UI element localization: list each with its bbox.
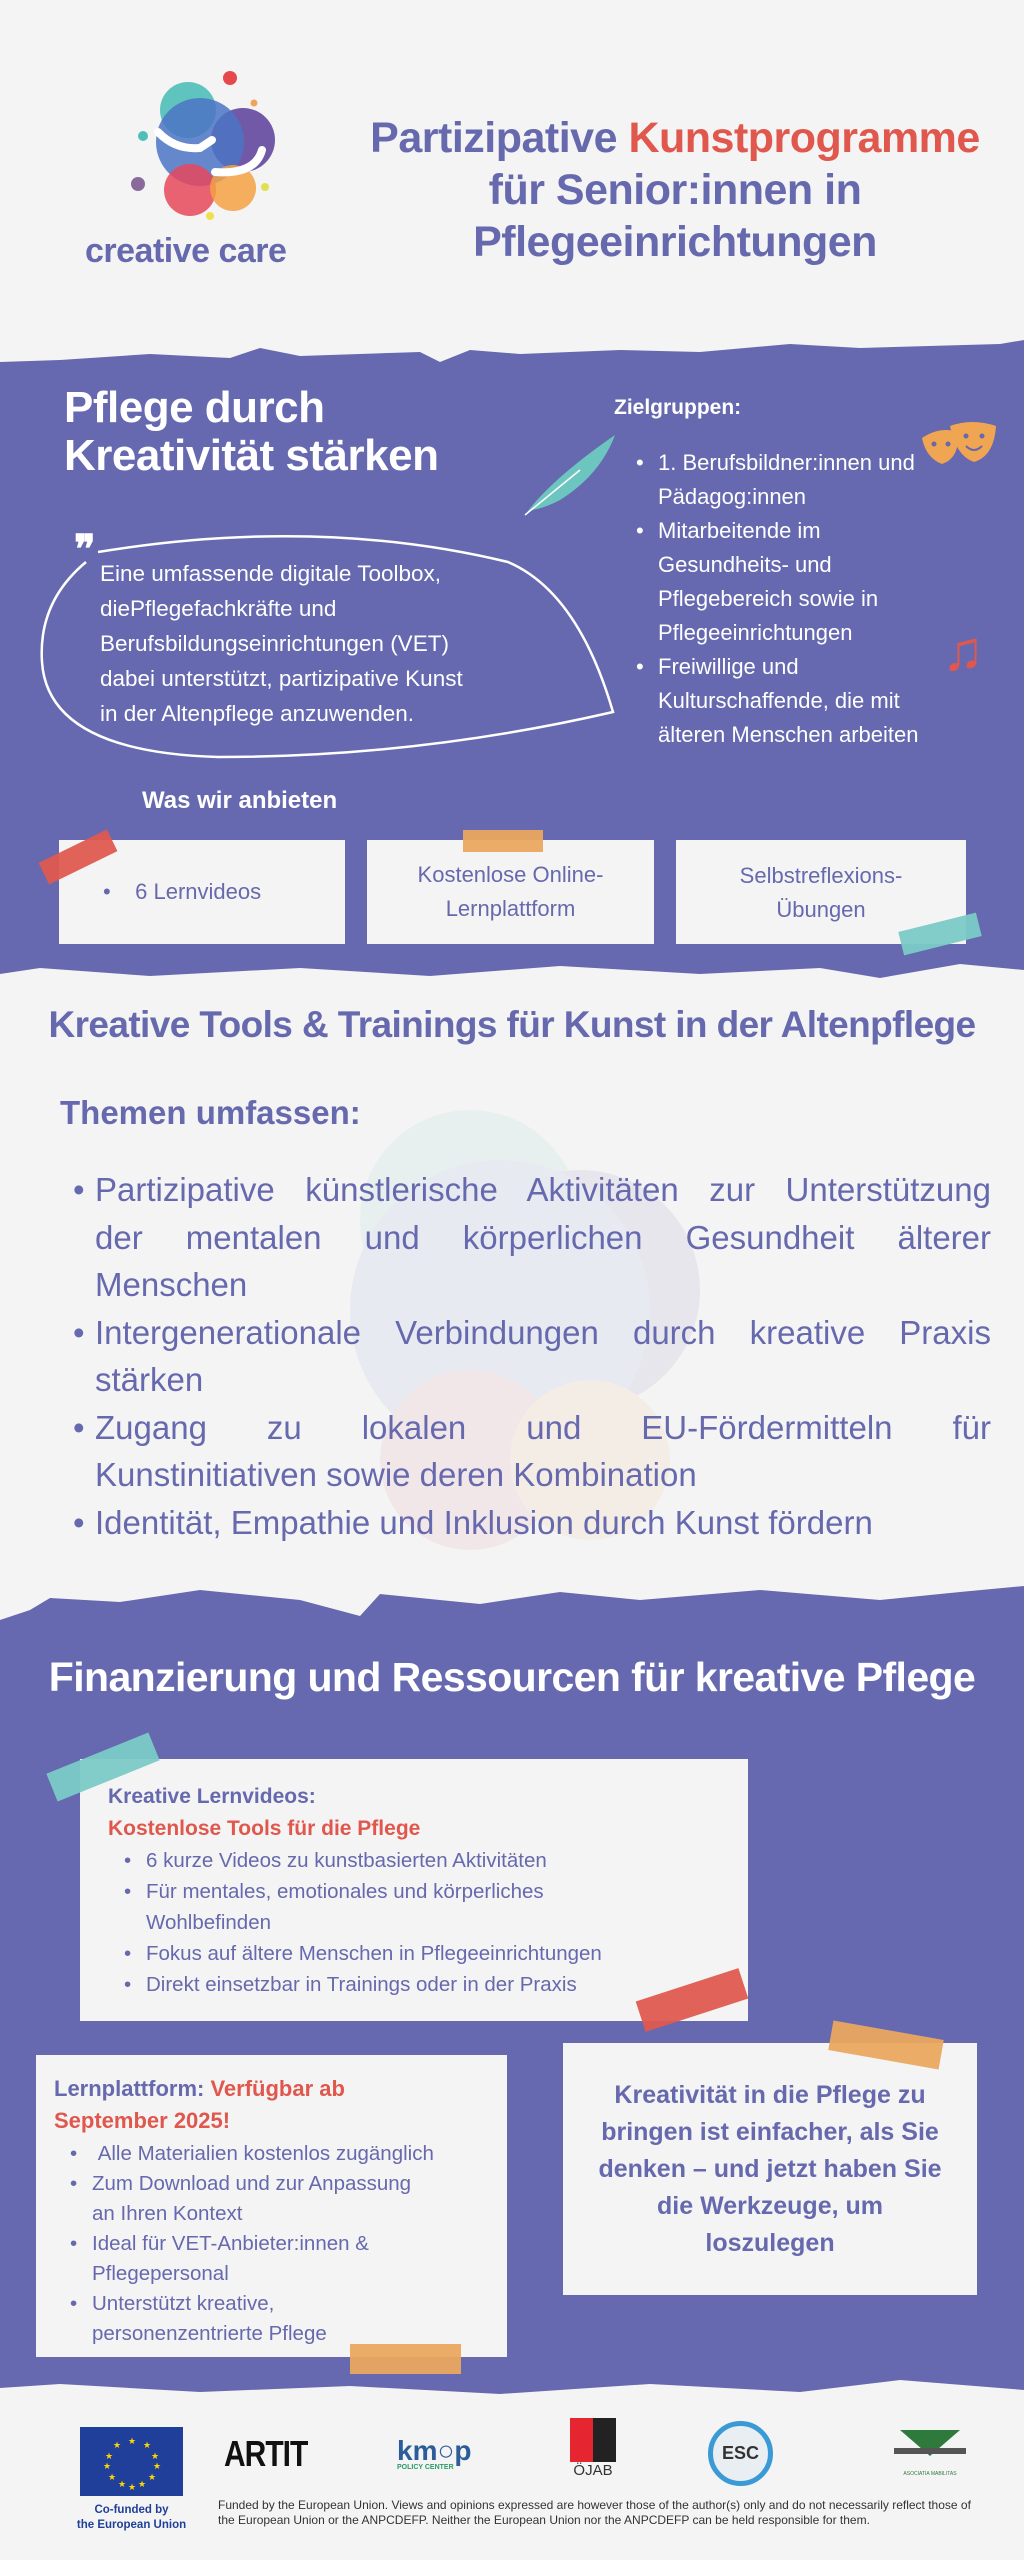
card: Lernplattform: Pflegepersonal <box>92 2262 229 2285</box>
logo: EU flag: ★ <box>137 2478 146 2488</box>
zielgruppen: Mitarbeitende im <box>658 518 821 543</box>
logo: OJAB <box>570 2418 616 2479</box>
watermark logo <box>350 1110 700 1550</box>
offer card: videos: • 6 Lernvideos <box>103 879 261 904</box>
offer card: reflection: Selbstreflexions- <box>740 863 902 888</box>
logo: creative care <box>85 71 286 270</box>
logo: ESC: ESC <box>722 2443 759 2463</box>
heading: Pflege durch Kreativität stärken: Pflege durch <box>64 383 324 432</box>
logo: EU flag: ★ <box>104 2450 113 2460</box>
card: Lernplattform: an Ihren Kontext <box>92 2202 242 2225</box>
zielgruppen: Freiwillige und <box>658 654 799 679</box>
logo: EU flag: ★ <box>127 2482 136 2492</box>
heading: Pflege durch Kreativität stärken <box>64 383 438 480</box>
offer card: platform <box>367 840 654 944</box>
logo: EU flag <box>80 2427 183 2496</box>
panel: purple band intro <box>0 340 1024 978</box>
logo: OJAB: ÖJAB <box>573 2462 613 2479</box>
logo: Mabilitas <box>894 2430 966 2477</box>
icon: theatre masks <box>922 422 996 464</box>
subheading: Themen umfassen: Themen umfassen: <box>60 1094 361 1131</box>
card: Lernvideos: Fokus auf ältere Menschen in Pflegeeinrichtungen <box>146 1942 602 1965</box>
card: Lernvideos: Kreative Lernvideos: <box>108 1785 316 1808</box>
list: themes: Menschen <box>95 1266 247 1303</box>
card: Lernvideos: Wohlbefinden <box>146 1911 271 1934</box>
title: für Senior:innen in <box>489 166 861 214</box>
title <box>370 114 980 266</box>
logo: EU flag: ★ <box>117 2478 126 2488</box>
zielgruppen <box>614 396 918 747</box>
card: quote <box>563 2043 977 2295</box>
list: themes: Identität, Empathie und Inklusion durch Kunst fördern <box>95 1504 873 1540</box>
card: Lernplattform: Unterstützt kreative, <box>92 2292 274 2315</box>
offer card: reflection: Übungen <box>776 897 866 922</box>
heading: Kreative Tools: Kreative Tools & Trainings für Kunst in der Altenpflege <box>48 1004 976 1045</box>
logo: EU flag: ★ <box>150 2450 159 2460</box>
list: themes: Zugang zu lokalen und EU-Fördermitteln für <box>95 1408 991 1446</box>
logo: EU flag: ★ <box>152 2460 161 2470</box>
logo text: creative care <box>85 232 286 270</box>
heading: Finanzierung: Finanzierung und Ressourcen für kreative Pflege <box>49 1654 975 1700</box>
zielgruppen: Pädagog:innen <box>658 484 806 509</box>
card: Lernvideos: Für mentales, emotionales und körperliches <box>146 1880 544 1903</box>
card: Lernplattform: September 2025! <box>54 2108 230 2133</box>
card: Lernvideos: 6 kurze Videos zu kunstbasierten Aktivitäten <box>146 1849 547 1872</box>
icon: music note: ♫ <box>942 619 984 682</box>
list: themes: Kunstinitiativen sowie deren Kombination <box>95 1456 697 1493</box>
speech bubble: ❞ <box>74 528 96 572</box>
zielgruppen: Kulturschaffende, die mit <box>658 688 900 713</box>
logo: ARTIT: ARTIT <box>224 2435 307 2474</box>
speech bubble: Berufsbildungseinrichtungen (VET) <box>100 631 449 656</box>
card: Lernplattform: Ideal für VET-Anbieter:innen & <box>92 2232 369 2255</box>
list: themes: Intergenerationale Verbindungen durch kreative Praxis <box>95 1314 991 1350</box>
offer card: platform: Kostenlose Online- <box>418 862 603 887</box>
heading: Pflege durch Kreativität stärken: Kreativität stärken <box>64 431 438 480</box>
speech bubble: dabei unterstützt, partizipative Kunst <box>100 666 463 691</box>
speech bubble <box>40 528 614 758</box>
logo: EU flag: ★ <box>112 2440 121 2450</box>
zielgruppen: 1. Berufsbildner:innen und <box>658 450 915 475</box>
offer card: platform: Lernplattform <box>446 896 575 921</box>
list: themes: der mentalen und körperlichen Gesundheit älterer <box>95 1218 991 1256</box>
zielgruppen: Pflegeeinrichtungen <box>658 620 852 645</box>
card: quote: bringen ist einfacher, als Sie <box>601 2118 939 2146</box>
card: Lernvideos: Kostenlose Tools für die Pflege <box>108 1817 420 1840</box>
logo: kmop: km○p <box>397 2435 471 2466</box>
card: quote: loszulegen <box>705 2228 835 2256</box>
card: Lernvideos <box>80 1759 748 2021</box>
heading: Was wir anbieten: Was wir anbieten <box>142 787 337 814</box>
card: quote: Kreativität in die Pflege zu <box>614 2080 926 2108</box>
logo: kmop: POLICY CENTER <box>397 2464 454 2471</box>
card: quote: die Werkzeuge, um <box>657 2192 883 2220</box>
logo: EU flag: ★ <box>127 2436 136 2446</box>
card: Lernplattform <box>36 2055 507 2357</box>
zielgruppen: älteren Menschen arbeiten <box>658 722 918 747</box>
title: Pflegeeinrichtungen <box>473 218 877 266</box>
list: themes: Partizipative künstlerische Aktivitäten zur Unterstützung <box>95 1171 991 1208</box>
offer card: reflection <box>676 840 966 944</box>
card: quote: denken – und jetzt haben Sie <box>598 2154 942 2182</box>
logo: EU flag: ★ <box>142 2440 151 2450</box>
card: Lernvideos: Direkt einsetzbar in Trainings oder in der Praxis <box>146 1973 577 1996</box>
text: co-funded: the European Union <box>77 2519 186 2531</box>
disclaimer text: Funded by the European Union. Views and opinions expressed are however those of the author(s) only and do not necessarily reflect those of the European Union or the ANPCDEFP. Neither the European Union nor the ANPCDEFP can be held responsible for them. <box>218 2498 971 2527</box>
speech bubble: Eine umfassende digitale Toolbox, <box>100 561 441 586</box>
zielgruppen: Gesundheits- und <box>658 552 832 577</box>
speech bubble: in der Altenpflege anzuwenden. <box>100 701 414 726</box>
zielgruppen: Pflegebereich sowie in <box>658 586 878 611</box>
text: co-funded <box>77 2504 186 2531</box>
logo: EU flag: ★ <box>147 2472 156 2482</box>
speech bubble: diePflegefachkräfte und <box>100 596 336 621</box>
zielgruppen: Zielgruppen: <box>614 396 741 419</box>
icon: feather <box>524 435 615 516</box>
panel: funding purple band <box>0 1586 1024 2394</box>
card: Lernplattform: Lernplattform: Verfügbar ab <box>54 2076 345 2101</box>
offer card: videos <box>59 840 345 944</box>
logo: Mabilitas: ASOCIATIA MABILITAS <box>903 2471 957 2477</box>
card: Lernplattform: Alle Materialien kostenlos zugänglich <box>98 2142 434 2165</box>
title: Partizipative Kunstprogramme <box>370 114 980 162</box>
logo: ESC <box>708 2421 773 2486</box>
card: Lernplattform: personenzentrierte Pflege <box>92 2322 327 2345</box>
logo: EU flag: ★ <box>107 2472 116 2482</box>
card: Lernplattform: Zum Download und zur Anpassung <box>92 2172 411 2195</box>
list: themes <box>74 1171 991 1541</box>
logo: EU flag: ★ <box>102 2460 111 2470</box>
text: co-funded: Co-funded by <box>94 2504 169 2516</box>
footer logos <box>77 2418 971 2531</box>
list: themes: stärken <box>95 1361 203 1398</box>
